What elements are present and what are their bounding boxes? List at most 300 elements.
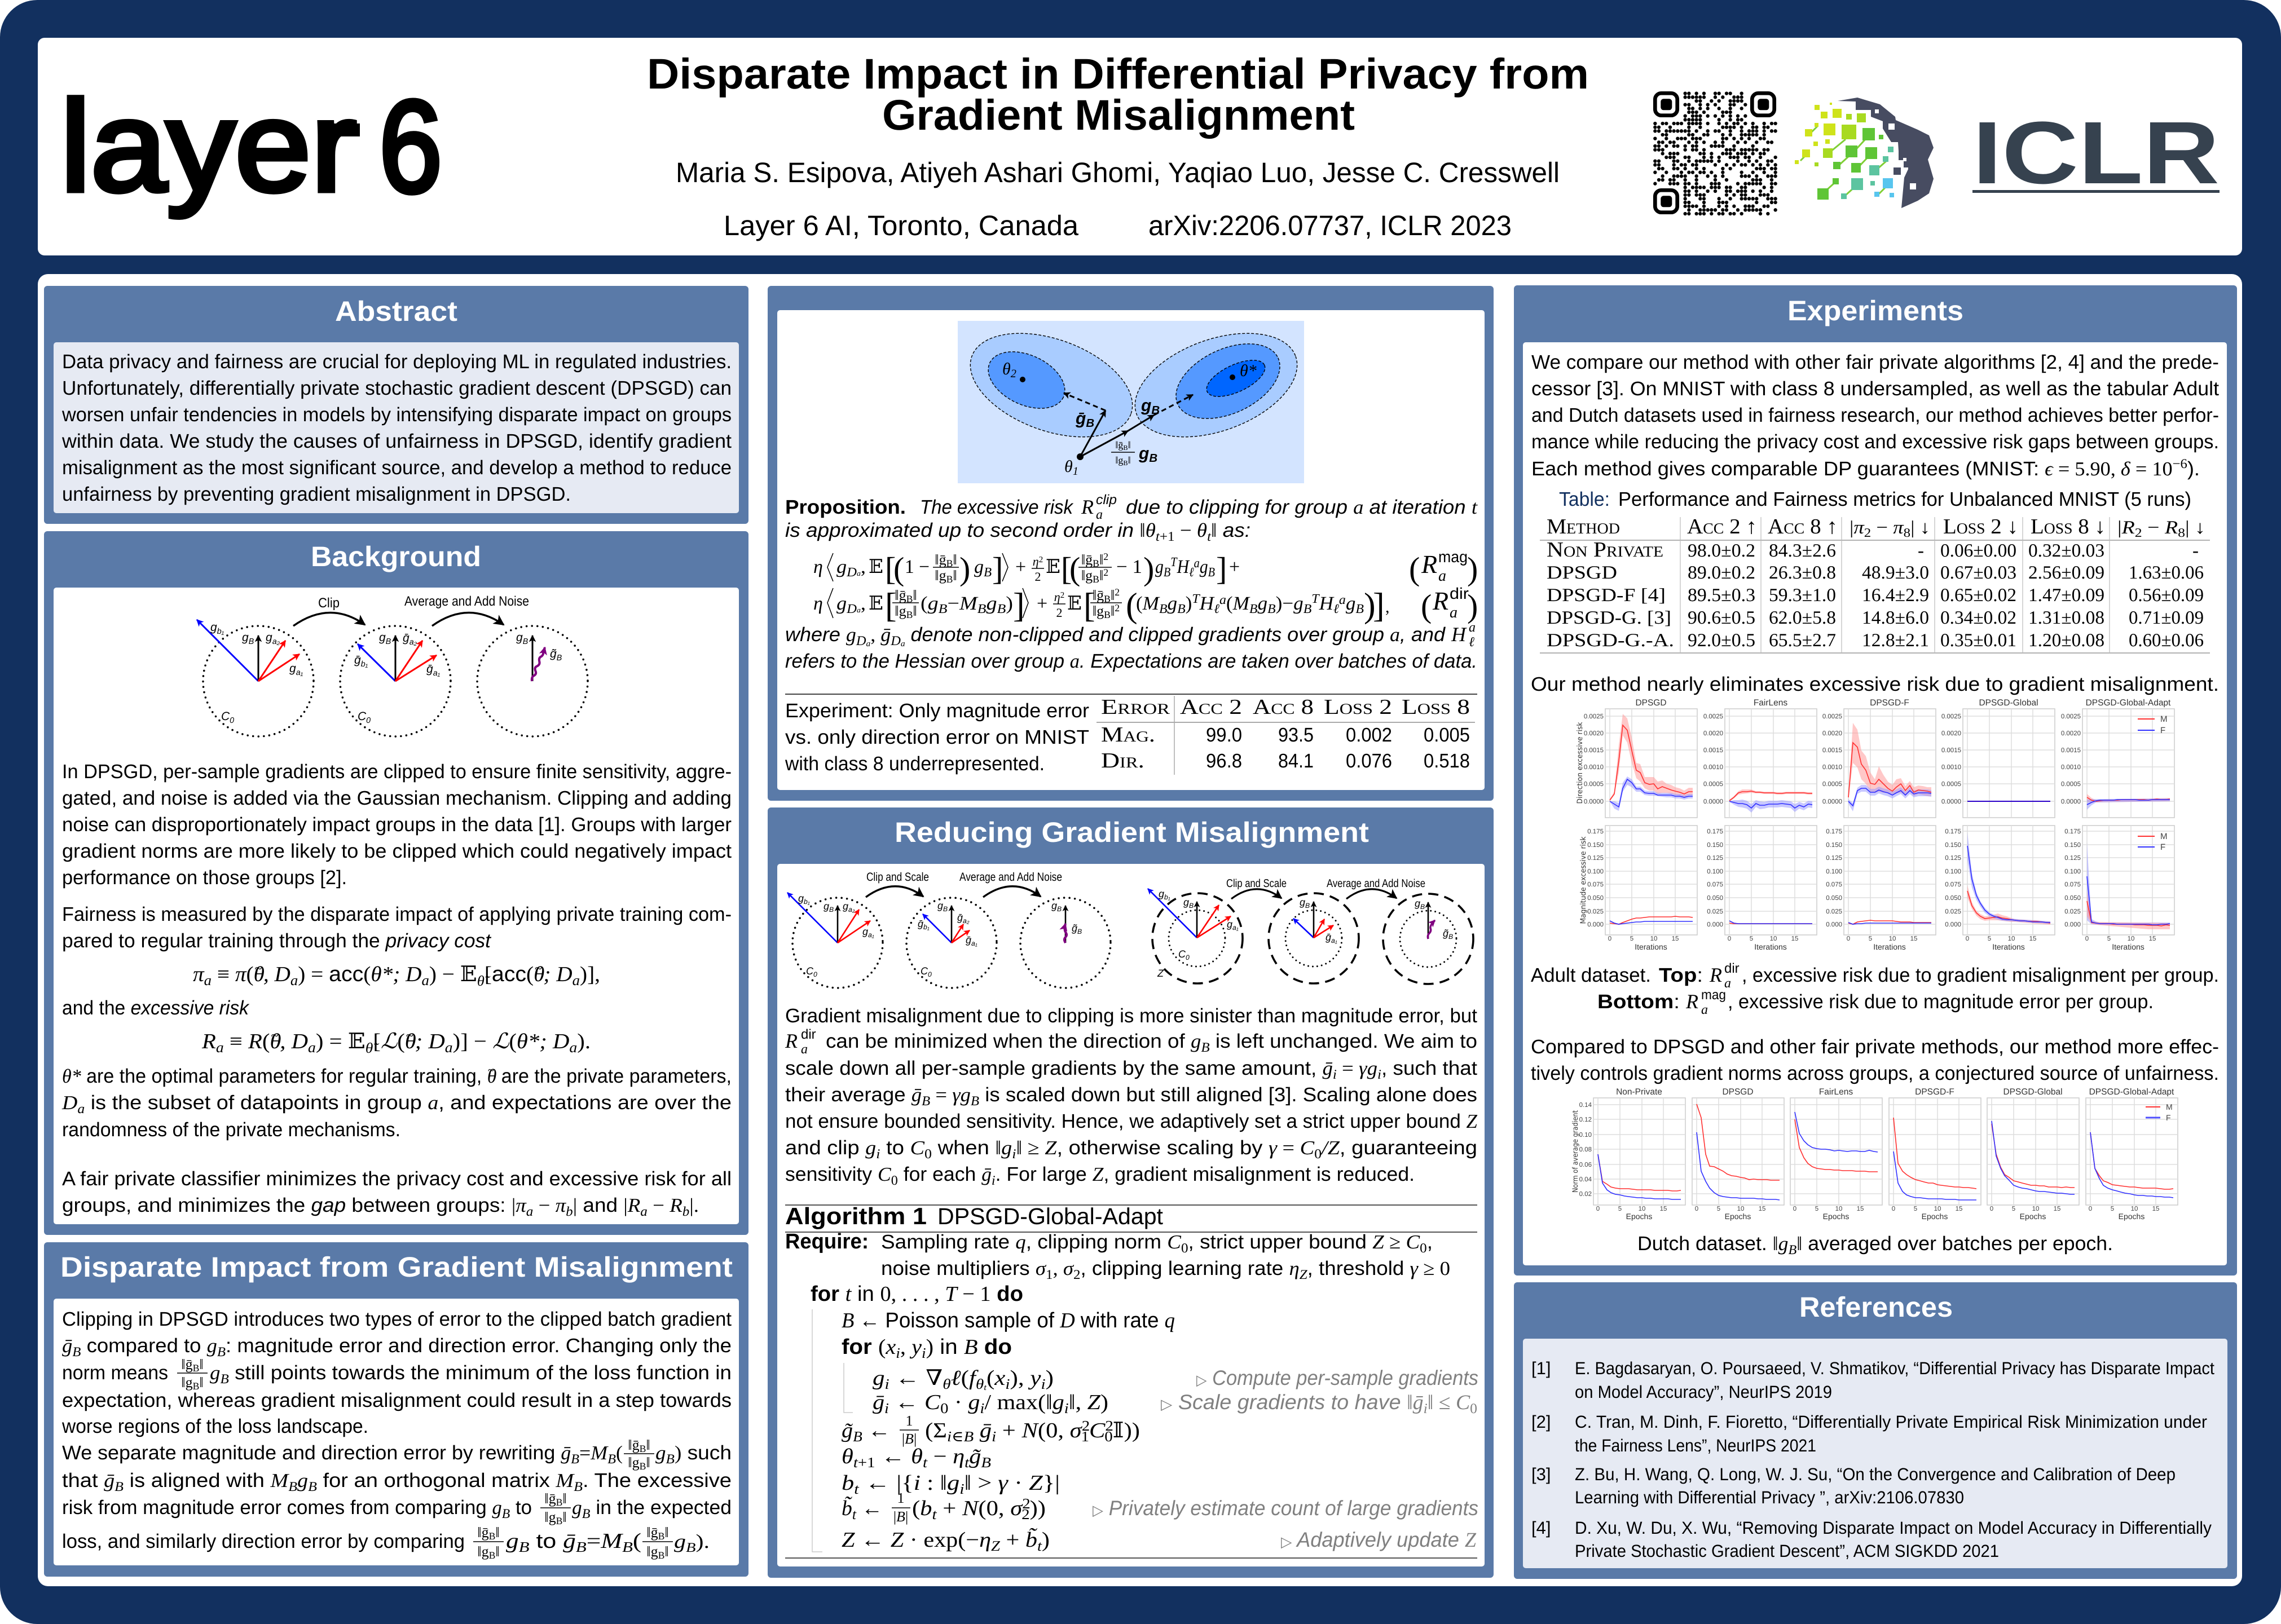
chart: DPSGD magnitude risk: 0.050 (1587, 895, 1604, 902)
chart: FairLens gradient norm: 15 (1857, 1206, 1864, 1212)
background text: fairness definitions (61, 903, 732, 1141)
text: gradient norm comparison: Compared to DPSGD and other fair private methods, our method more effec- (1531, 1036, 2219, 1058)
algorithm: DPSGD-Global-Adapt: ℓ (951, 1366, 961, 1390)
text: error decomposition: B (571, 1452, 580, 1467)
equation: R mag term: ) (959, 550, 970, 587)
algorithm: DPSGD-Global-Adapt: i (1041, 1376, 1046, 1392)
table: magnitude vs direction error: Error (1101, 695, 1170, 719)
figure: loss landscape: g (1139, 444, 1149, 463)
panel: background (44, 531, 748, 1235)
algorithm: DPSGD-Global-Adapt: B ← Poisson sample of D with rate q (842, 1309, 1175, 1332)
equation: R dir term: ‖ (1111, 603, 1115, 619)
equation: R mag term: ‖ḡ (1081, 551, 1093, 568)
table: performance and fairness metrics: − (1871, 518, 1893, 538)
equation: R mag term: a (857, 569, 861, 577)
background text: fairness definitions: are the private parameters, (496, 1065, 732, 1087)
text: error decomposition: B (658, 1530, 664, 1542)
algorithm: DPSGD-Global-Adapt: i (922, 1345, 926, 1361)
text: error decomposition: : magnitude error and direction error. Changing only the (226, 1335, 732, 1357)
chart: DPSGD-Global-Adapt magnitude risk: 0.175 (2064, 828, 2081, 835)
text: error decomposition: B (308, 1480, 317, 1494)
chart: DPSGD-Global-Adapt gradient norm: DPSGD-Global-Adapt (2089, 1087, 2174, 1097)
table: performance and fairness metrics: Acc 8 ↑ (1768, 515, 1838, 539)
figure: clip and scale diagram, with upper bound Z: g (1227, 919, 1232, 930)
equation: R mag term: D (846, 565, 857, 580)
proposition note: H (1451, 623, 1467, 646)
caption: Adult dataset: Adult dataset. (1531, 964, 1651, 986)
figure: loss landscape: θ (1002, 360, 1011, 378)
table: performance and fairness metrics: 48.9±3.0 (1862, 563, 1929, 583)
background text: fairness definitions: ~ (406, 1029, 414, 1043)
proposition statement: due to clipping for group a at iteration t (1126, 496, 1478, 518)
equation: R dir term: ) (1467, 588, 1478, 624)
proposition note: , (870, 624, 880, 646)
figure: clip and scale diagram, scaling only: C (806, 965, 813, 977)
equation: R mag term: B (946, 573, 953, 585)
figure: clipping diagram: g (210, 621, 217, 634)
figure: clip and scale diagram, scaling only: b₁ (804, 898, 810, 906)
figure: clip and scale diagram, scaling only: b₁ (923, 923, 930, 931)
panel: proposition (768, 286, 1494, 801)
algorithm: DPSGD-Global-Adapt: ▷ Scale gradients to have ‖ḡ (1161, 1391, 1423, 1414)
text: error decomposition: expectation, whereas gradient misalignment could result in a step towards (62, 1389, 732, 1411)
equation: R dir term: 2 (1115, 586, 1120, 598)
caption: Adult dataset: dir (1724, 961, 1740, 976)
table: performance and fairness metrics: 0.60±0.06 (2129, 630, 2204, 651)
equation: R mag term: 2 (1039, 555, 1043, 564)
chart: DPSGD direction risk: 0.0000 (1584, 798, 1604, 805)
panel: references (1514, 1282, 2237, 1579)
text: error decomposition: g (674, 1530, 686, 1552)
table: performance and fairness metrics: 65.5±2.7 (1769, 630, 1836, 651)
chart: DPSGD-Global magnitude risk: 0.075 (1945, 881, 1961, 888)
text: error decomposition: . The excessive (583, 1469, 732, 1491)
text: method description: ‖g (995, 1137, 1011, 1159)
background text: fairness definitions: a (77, 1102, 85, 1116)
reference 4 (1531, 1518, 2212, 1561)
caption: Dutch dataset: B (1788, 1243, 1797, 1257)
chart: DPSGD-F magnitude risk: Iterations (1873, 942, 1906, 951)
equation: R mag term (813, 548, 1478, 587)
figure: clipping diagram: Average and Add Noise (404, 594, 529, 609)
y axis label: magnitude excessive risk: Magnitude excessive risk (1579, 836, 1588, 924)
text: error decomposition: B (556, 1515, 562, 1526)
chart: DPSGD-Global gradient norm (1987, 1087, 2079, 1221)
chart: DPSGD-Global-Adapt magnitude risk: 5 (2107, 935, 2111, 942)
text: error decomposition: ‖ḡ (628, 1437, 640, 1453)
equation: R dir term: ℓ (1333, 602, 1339, 616)
equation: R dir term: g (1346, 593, 1355, 614)
caption: Adult dataset: R (1685, 990, 1698, 1013)
text: method description: = (930, 1084, 952, 1106)
caption: Adult dataset: a (1701, 1003, 1708, 1017)
text: error decomposition: ‖ (199, 1356, 204, 1373)
background text: fairness definitions: ℒ(θ*; D (492, 1030, 566, 1053)
background text: fair classifier (62, 1168, 732, 1219)
background text: fairness definitions: )] − (453, 1030, 492, 1053)
equation: R dir term: ‖ (1111, 587, 1115, 603)
equation: R dir term: ( (1126, 586, 1138, 625)
background text: fairness definitions: a (308, 1039, 316, 1056)
algorithm: DPSGD-Global-Adapt: + (937, 1497, 962, 1520)
chart: DPSGD direction risk: 0.0005 (1584, 781, 1604, 788)
equation: R dir term (813, 585, 1478, 625)
chart: DPSGD gradient norm: 10 (1737, 1206, 1744, 1212)
chart: DPSGD-F direction risk: 0.0015 (1822, 747, 1842, 754)
text: error decomposition: ‖ (562, 1509, 567, 1525)
chart: DPSGD-Global-Adapt direction risk: 0.0025 (2061, 713, 2081, 720)
equation: R dir term: ) (1006, 593, 1013, 614)
figure: clip and scale diagram, with upper bound Z: B (1305, 902, 1310, 910)
algorithm: DPSGD-Global-Adapt: i (884, 1400, 889, 1416)
abstract text (61, 351, 732, 505)
text: error decomposition: B (288, 1480, 298, 1494)
equation: R dir term: B (1267, 602, 1276, 616)
chart: DPSGD-Global direction risk: 0.0010 (1941, 764, 1961, 771)
legend: M and F: M (2166, 1102, 2173, 1111)
chart: DPSGD-Global direction risk: 0.0025 (1941, 713, 1961, 720)
text: method description: for each (898, 1163, 981, 1185)
y axis ticks: 0.04 (1579, 1176, 1592, 1183)
algorithm: DPSGD-Global-Adapt: , (900, 1335, 911, 1359)
text: method description: i (876, 1147, 880, 1162)
algorithm: DPSGD-Global-Adapt: (b (912, 1497, 931, 1520)
algorithm: DPSGD-Global-Adapt: 0 (940, 1400, 948, 1416)
text: error decomposition: such (687, 1442, 729, 1464)
equation: R dir term: B (997, 602, 1006, 616)
chart: DPSGD magnitude risk: Iterations (1635, 942, 1667, 951)
proposition statement: +1 (1160, 529, 1175, 544)
algorithm: DPSGD-Global-Adapt: t (854, 1481, 860, 1497)
table: performance and fairness metrics: R (2164, 518, 2178, 538)
equation: R dir term: g (836, 593, 847, 614)
chart: DPSGD-Global direction risk: DPSGD-Global (1979, 698, 2038, 708)
table: performance and fairness metrics: 98.0±0.2 (1688, 541, 1755, 561)
caption: Dutch dataset: averaged over batches per epoch. (1808, 1233, 2107, 1255)
background text: fairness definitions: D (61, 1092, 77, 1114)
equation: R dir term: [ (1084, 586, 1095, 625)
equation: R dir term: D (846, 602, 857, 616)
chart: DPSGD-Global gradient norm: 0 (1990, 1206, 1993, 1212)
text: method description: B (922, 1094, 931, 1109)
proposition statement: The excessive risk (920, 496, 1073, 518)
text: error decomposition: B (220, 1372, 229, 1387)
algorithm: DPSGD-Global-Adapt: Require: (785, 1230, 869, 1254)
text: error decomposition: B (574, 1480, 583, 1494)
figure: clip and scale diagram, scaling only: ḡ (918, 918, 923, 929)
chart: DPSGD gradient norm: 15 (1759, 1206, 1765, 1212)
text: error decomposition: to (510, 1497, 532, 1519)
caption: Adult dataset: , excessive risk due to gradient misalignment per group. (1742, 964, 2219, 986)
equation: R dir term: (g (921, 593, 937, 614)
y axis ticks: 0.02 (1579, 1191, 1592, 1198)
chart: FairLens magnitude risk: 0.075 (1707, 881, 1723, 888)
legend: M and F: F (2160, 842, 2165, 852)
chart: DPSGD-Global-Adapt gradient norm: 15 (2152, 1206, 2159, 1212)
text: error decomposition: ‖ (495, 1524, 500, 1541)
equation: R mag term: ‖g (1081, 567, 1093, 584)
chart: DPSGD-F gradient norm: 15 (1956, 1206, 1962, 1212)
algorithm: DPSGD-Global-Adapt: σ (1063, 1257, 1075, 1279)
algorithm: DPSGD-Global-Adapt: N(0, σ (1021, 1419, 1080, 1442)
background text: fairness definitions: θ̃ (366, 1040, 380, 1056)
chart: DPSGD-Global gradient norm: DPSGD-Global (2003, 1087, 2063, 1097)
background text: fairness definitions: ). (577, 1030, 591, 1053)
equation: R mag term: + (1229, 557, 1240, 577)
equation: R dir term: T (1192, 592, 1201, 606)
text: error decomposition: ‖g (477, 1543, 489, 1560)
algorithm: DPSGD-Global-Adapt: 2 (1105, 1418, 1113, 1434)
equation: R mag term: ( (1409, 550, 1420, 587)
chart: DPSGD-Global gradient norm: Epochs (2020, 1212, 2046, 1221)
algorithm: DPSGD-Global-Adapt: g̃ (842, 1419, 853, 1442)
chart: FairLens magnitude risk: 0.100 (1707, 868, 1723, 875)
algorithm: DPSGD-Global-Adapt: 2 (1073, 1268, 1081, 1282)
text: method description: Gradient misalignment due to clipping is more sinister than magnitude error, but (785, 1005, 1477, 1027)
chart: DPSGD direction risk: DPSGD (1635, 698, 1667, 708)
panel: reducing gradient misalignment (768, 807, 1494, 1578)
abstract text: worsen unfair tendencies in models by intensifying disparate impact on groups (61, 404, 732, 426)
equation: R dir term: H (1319, 593, 1335, 614)
background text: fairness definitions: , D (263, 963, 290, 986)
equation: R dir term: ( (1226, 593, 1233, 614)
chart: DPSGD-Global direction risk: 0.0015 (1941, 747, 1961, 754)
algorithm: DPSGD-Global-Adapt: ← (875, 1445, 911, 1468)
table: performance and fairness metrics: 0.06±0.00 (1940, 541, 2016, 561)
equation: R dir term: − (948, 593, 959, 614)
figure: clip and scale diagram, with upper bound Z: g (1415, 898, 1420, 909)
text: error decomposition: g (655, 1442, 666, 1464)
chart: DPSGD-Global-Adapt magnitude risk: 0 (2085, 935, 2089, 942)
chart: DPSGD-Global-Adapt gradient norm: Epochs (2119, 1212, 2145, 1221)
figure: loss landscape: B (1149, 452, 1157, 465)
text: gradient norm comparison (1531, 1036, 2219, 1084)
proposition statement: − (1175, 519, 1197, 541)
text: error decomposition: B (115, 1480, 124, 1494)
text: error decomposition: ‖ḡ (477, 1524, 489, 1541)
proposition statement: as: (1222, 519, 1249, 541)
logo: ICLR: ICLR (1972, 104, 2220, 202)
text: error decomposition: worse regions of the loss landscape. (61, 1415, 368, 1437)
equation: R mag term: g (974, 557, 984, 577)
legend: M and F: F (2160, 726, 2165, 735)
algorithm: DPSGD-Global-Adapt: )) (1030, 1497, 1046, 1520)
table: performance and fairness metrics: |R (2117, 518, 2133, 538)
chart: DPSGD-F magnitude risk: 0.150 (1826, 842, 1842, 849)
algorithm: DPSGD-Global-Adapt: in B do (940, 1335, 1010, 1359)
background text: fairness definitions: a, and expectations are over the (428, 1092, 710, 1114)
chart: DPSGD-F gradient norm (1889, 1087, 1981, 1221)
table caption: Table: (1559, 488, 1610, 510)
table: magnitude vs direction error: 93.5 (1278, 724, 1314, 746)
chart: DPSGD-Global-Adapt gradient norm (2086, 1087, 2178, 1221)
algorithm: DPSGD-Global-Adapt: θ (842, 1445, 853, 1468)
proposition note: a, and (1390, 624, 1444, 646)
y axis label: norm of average gradient: Norm of average gradient (1571, 1110, 1580, 1193)
figure: clip and scale diagram, scaling only: g (798, 893, 804, 904)
equation: R dir term: B (1104, 609, 1111, 620)
figure: clip and scale diagram, scaling only: g (862, 926, 868, 937)
reference 3 (1531, 1464, 2176, 1507)
figure: clip and scale diagram, scaling only: g (1051, 900, 1057, 911)
chart: DPSGD-Global-Adapt magnitude risk: 0.050 (2064, 895, 2081, 902)
chart: DPSGD-Global-Adapt magnitude risk: 0.100 (2064, 868, 2081, 875)
chart: DPSGD-Global-Adapt magnitude risk: 0.150 (2064, 842, 2081, 849)
proposition statement: Proposition. (785, 496, 906, 518)
background text: fairness definitions: acc(θ (492, 963, 544, 986)
abstract text: unfairness by preventing gradient misalignment in DPSGD. (62, 483, 571, 505)
text: error decomposition: B (217, 1345, 226, 1360)
background text: DPSGD: gradient norms are more likely to be clipped which could negatively impact (62, 840, 732, 862)
table: performance and fairness metrics: 1.47±0.09 (2028, 585, 2104, 606)
figure: clip and scale diagram, with upper bound Z: a₁ (1331, 937, 1337, 945)
reference 3: [3] (1531, 1464, 1551, 1484)
text: experiment note: vs. only direction error on MNIST (785, 726, 1089, 748)
text: method description: dir (801, 1027, 816, 1042)
reference 2: [2] (1531, 1412, 1551, 1432)
chart: DPSGD magnitude risk: 0 (1608, 935, 1611, 942)
text: error decomposition: ). (695, 1530, 710, 1552)
algorithm: DPSGD-Global-Adapt: i (885, 1376, 889, 1392)
chart: Non-Private gradient norm: 10 (1639, 1206, 1645, 1212)
heading: background: Background (311, 541, 481, 572)
algorithm: DPSGD-Global-Adapt: B (981, 1454, 991, 1471)
equation: R mag term: ) (1467, 550, 1478, 587)
text: method description: i (1377, 1067, 1381, 1082)
equation: R mag term: a (1194, 556, 1200, 571)
text: error decomposition: ‖ḡ (181, 1356, 193, 1373)
equation: R dir term: g (1258, 593, 1267, 614)
algorithm: DPSGD-Global-Adapt: 0 (1104, 1428, 1113, 1445)
chart: DPSGD-Global gradient norm: 10 (2032, 1206, 2039, 1212)
equation: R mag term: ) (1143, 550, 1154, 587)
equation: R dir term: M (1233, 593, 1249, 614)
chart: DPSGD-Global gradient norm: 5 (2012, 1206, 2015, 1212)
equation: R mag term: η (1033, 554, 1039, 568)
text: error decomposition: still points towards the minimum of the loss function in (229, 1362, 732, 1384)
figure: clipping diagram: b₁ (217, 627, 224, 636)
table: performance and fairness metrics: 0.67±0.03 (1940, 563, 2016, 583)
algorithm: DPSGD-Global-Adapt: ← (856, 1497, 883, 1520)
figure: clip and scale diagram, scaling only: a₂ (963, 917, 970, 925)
equation: R dir term: ] (1373, 586, 1385, 625)
panel: disparate impact from gradient misalignment (44, 1242, 748, 1577)
equation: R dir term: η (1054, 590, 1060, 604)
text: error decomposition: = (587, 1529, 601, 1553)
abstract text: Unfortunately, differentially private stochastic gradient descent (DPSGD) can (62, 377, 732, 399)
table: performance and fairness metrics: 1.20±0.08 (2028, 630, 2104, 651)
chart: DPSGD-Global magnitude risk: 0.025 (1945, 908, 1961, 915)
background text: fairness definitions: )], (580, 963, 600, 986)
text: method description: ḡ (981, 1163, 992, 1185)
text: method description: Z, gradient misalignment is reduced. (1093, 1163, 1410, 1185)
text: error decomposition: B (489, 1550, 495, 1561)
proposition note: ℓ (1469, 635, 1474, 650)
text: method description: 0 (924, 1147, 932, 1162)
equation: R dir term: B (1249, 602, 1258, 616)
algorithm: DPSGD-Global-Adapt: x (994, 1366, 1006, 1390)
equation: R mag term: B (946, 558, 953, 569)
abstract text: misalignment as the most significant source, and develop a method to reduce (62, 457, 732, 479)
text: method description: = (1337, 1057, 1359, 1079)
reference 1: on Model Accuracy”, NeurIPS 2019 (1575, 1382, 1832, 1402)
chart: DPSGD-Global magnitude risk: 0.050 (1945, 895, 1961, 902)
chart: FairLens direction risk: 0.0000 (1703, 798, 1723, 805)
background text: DPSGD: noise can disproportionately impact groups in the data [1]. Groups with larger (62, 814, 732, 836)
chart group: Dutch dataset gradient norms (1571, 1087, 2178, 1221)
chart: DPSGD-Global-Adapt direction risk: 0.0020 (2061, 730, 2081, 737)
figure: clip and scale diagram, scaling only: B (1077, 928, 1082, 935)
equation: R mag term: B (1164, 565, 1170, 580)
figure: loss landscape: θ (1064, 457, 1073, 476)
background text: fairness definitions: R(θ (248, 1030, 280, 1053)
background text: fairness definitions: ; D (415, 1030, 445, 1053)
background text: fairness definitions: a (204, 972, 212, 988)
text: error decomposition: B (519, 1539, 530, 1555)
text: error decomposition: ‖ (646, 1437, 650, 1453)
equation: R dir term: B (1104, 593, 1111, 604)
text: experiment intro: and Dutch datasets used in fairness research, our method achieves better perfor- (1531, 404, 2219, 426)
chart: FairLens direction risk (1703, 698, 1817, 818)
table: performance and fairness metrics: Non Private (1547, 538, 1663, 562)
algorithm: DPSGD-Global-Adapt: noise multipliers σ (881, 1257, 1045, 1279)
chart group: Adult dataset excessive risk (1576, 698, 2174, 951)
chart: DPSGD-F direction risk: 0.0010 (1822, 764, 1842, 771)
table: performance and fairness metrics: 2 (1864, 526, 1871, 540)
text: method description: B (971, 1094, 980, 1109)
text: error decomposition: ‖ḡ (646, 1524, 658, 1541)
text: error decomposition: B (193, 1380, 199, 1392)
authors: Maria S. Esipova, Atiyeh Ashari Ghomi, Yaqiao Luo, Jesse C. Cresswell (676, 157, 1560, 188)
table: performance and fairness metrics: 26.3±0.8 (1769, 563, 1836, 583)
equation: R mag term: g (1155, 557, 1165, 577)
text: method description: 0 (1314, 1147, 1322, 1162)
chart: DPSGD-F magnitude risk: 0.000 (1826, 921, 1842, 928)
background text: fairness definitions: , D (280, 1030, 308, 1053)
algorithm: DPSGD-Global-Adapt: b̃ (1025, 1528, 1038, 1552)
text: error decomposition: ( (633, 1529, 641, 1553)
chart: FairLens magnitude risk: 0.025 (1707, 908, 1723, 915)
text: experiment intro: We compare our method with other fair private algorithms [2, 4] and the prede- (1531, 351, 2219, 373)
equation: R mag term: η (813, 557, 823, 577)
algorithm: DPSGD-Global-Adapt: η (953, 1445, 965, 1468)
algorithm: DPSGD-Global-Adapt: i : ‖g (914, 1471, 958, 1495)
proposition statement: t (1207, 529, 1212, 544)
text: error decomposition: B (686, 1541, 696, 1555)
equation: R mag term: ‖ (1099, 567, 1103, 584)
equation: R dir term: B (906, 609, 913, 620)
y axis ticks: 0.10 (1579, 1132, 1592, 1138)
chart: FairLens magnitude risk: 5 (1750, 935, 1753, 942)
chart: DPSGD-F direction risk: 0.0000 (1822, 798, 1842, 805)
logo: layer 6: layer (60, 75, 356, 218)
algorithm: DPSGD-Global-Adapt: ḡ (974, 1419, 992, 1442)
equation: R dir term: ‖ḡ (1093, 587, 1104, 603)
algorithm: DPSGD-Global-Adapt: for (x (842, 1335, 895, 1359)
text: error decomposition: B (193, 1362, 199, 1374)
chart: DPSGD-Global-Adapt magnitude risk: 10 (2128, 935, 2134, 942)
figure: loss landscape: B (1123, 444, 1128, 452)
caption: Adult dataset: Bottom : (1597, 991, 1680, 1013)
table: performance and fairness metrics: 89.0±0.2 (1688, 563, 1755, 583)
table: magnitude vs direction error: 96.8 (1206, 750, 1242, 772)
figure: clip and scale diagram, with upper bound Z: Average and Add Noise (1327, 877, 1425, 890)
legend: M and F: F (2166, 1113, 2171, 1122)
caption: Adult dataset: mag (1701, 987, 1726, 1003)
equation: R dir term: ‖ḡ (895, 587, 906, 603)
chart: DPSGD magnitude risk: 0.000 (1587, 921, 1604, 928)
algorithm: DPSGD-Global-Adapt: θ (976, 1376, 984, 1392)
